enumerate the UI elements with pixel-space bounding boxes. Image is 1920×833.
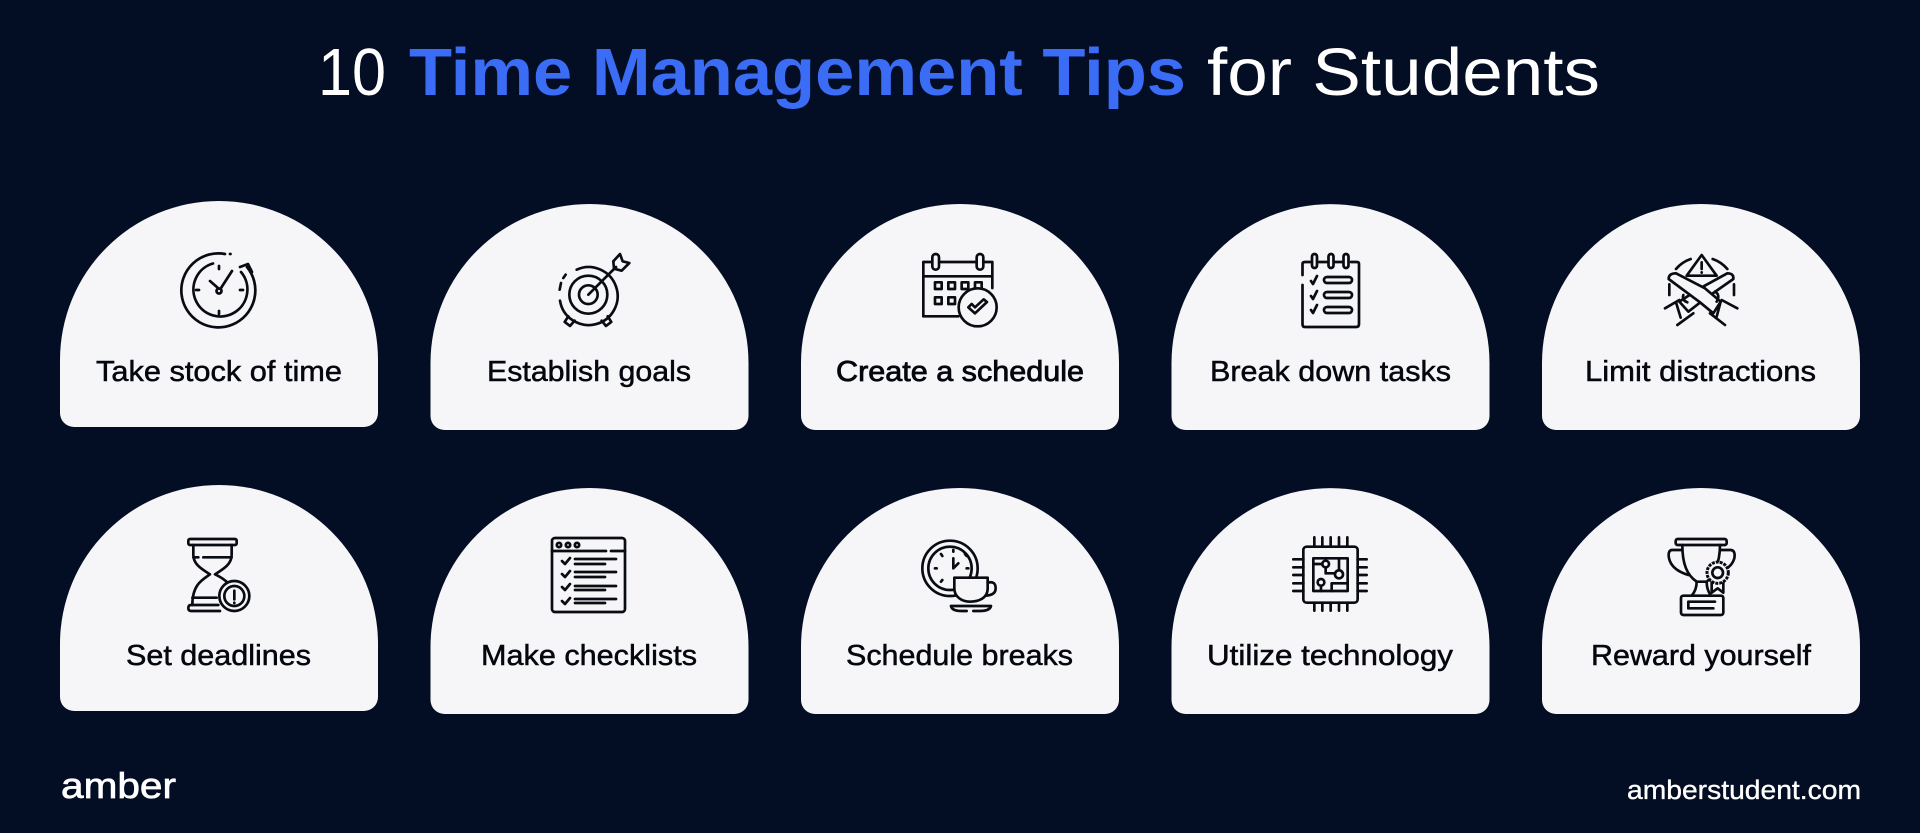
icon: circuit chip (1293, 537, 1367, 611)
title: 10 (318, 35, 386, 110)
panel: reward yourself (1542, 488, 1860, 714)
panel: make checklists (430, 488, 748, 714)
label: Limit distractions (1585, 356, 1816, 388)
label: Create a schedule (836, 356, 1084, 388)
title (318, 35, 1600, 110)
panel: break down tasks (1172, 204, 1490, 430)
label: Establish goals (487, 356, 691, 388)
label: Utilize technology (1207, 640, 1454, 672)
label: Break down tasks (1210, 356, 1451, 388)
panel: schedule breaks (801, 488, 1119, 714)
label: Make checklists (481, 640, 697, 672)
icon: clock with circular arrow (181, 253, 255, 327)
label: Take stock of time (96, 356, 342, 388)
panel: utilize technology (1172, 488, 1490, 714)
label: Schedule breaks (846, 640, 1073, 672)
icon: notepad checklist (1302, 254, 1359, 327)
panel: create a schedule (801, 204, 1119, 430)
label: Set deadlines (126, 640, 311, 672)
icon: calendar with check (923, 254, 997, 326)
icon: clock and coffee cup (922, 541, 996, 611)
icon: hourglass with alert (188, 539, 249, 611)
icon: trophy with medal (1669, 539, 1735, 615)
icon: target with arrow (560, 254, 629, 326)
title: Time Management Tips (409, 35, 1186, 110)
label: Reward yourself (1591, 640, 1812, 672)
icon: browser checklist (552, 538, 625, 612)
icon: warning and crossed arms (1665, 255, 1737, 325)
panel: establish goals (430, 204, 748, 430)
title: for Students (1207, 35, 1600, 110)
panel: set deadlines (60, 485, 378, 711)
panel: limit distractions (1542, 204, 1860, 430)
logo: amber: amber (61, 765, 176, 806)
website url: amberstudent.com (1627, 775, 1861, 805)
panel: take stock of time (60, 201, 378, 427)
